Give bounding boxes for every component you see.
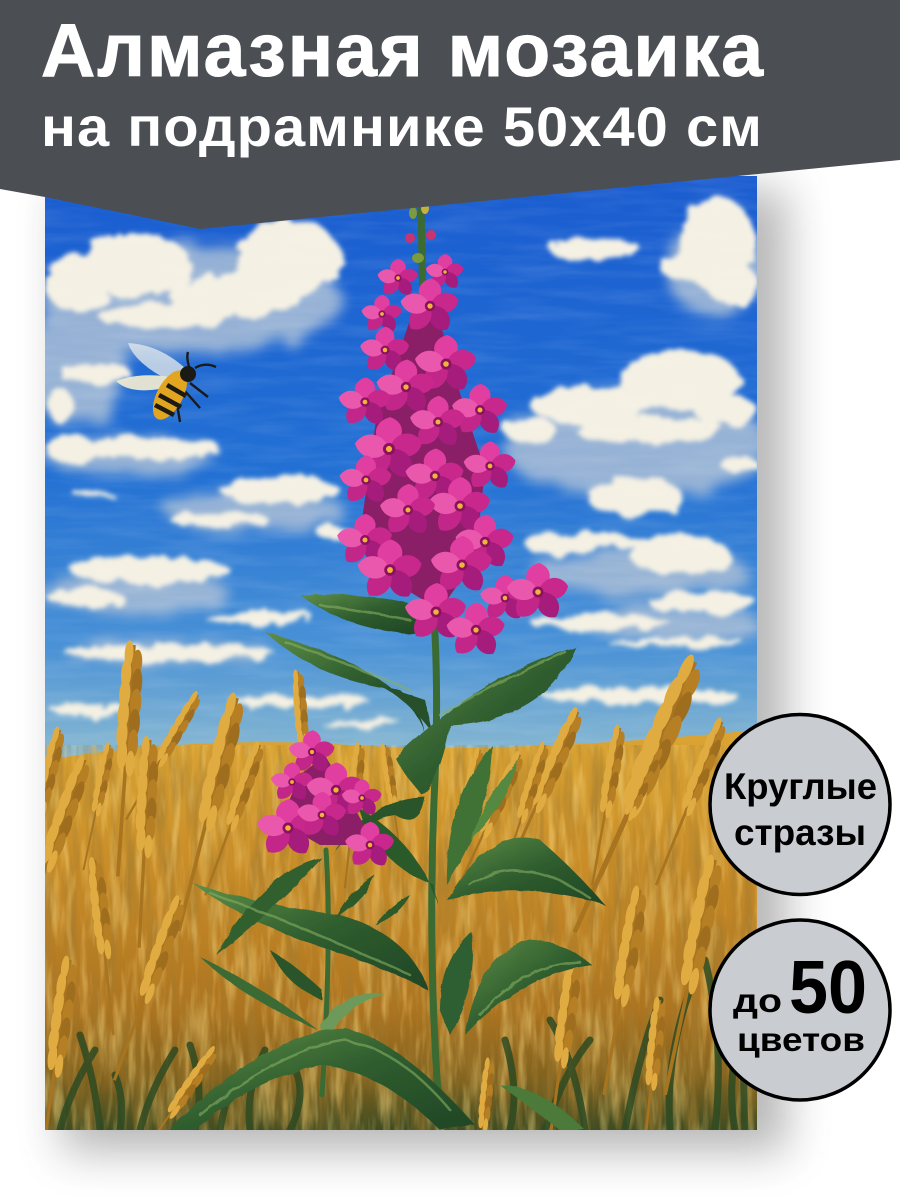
leaf highlights: [200, 605, 590, 1115]
wheat ears: [45, 640, 726, 1130]
fireweed flower spike: [337, 202, 568, 654]
title line 2: на подрамнике 50х40 см: [41, 95, 763, 158]
badge: up to 50 colours: цветов: [737, 1021, 865, 1058]
clouds: [25, 197, 770, 726]
header banner: [0, 0, 900, 229]
badge: up to 50 colours: [710, 920, 890, 1100]
badge: up to 50 colours: 50: [789, 945, 867, 1029]
painting: [45, 176, 757, 1130]
bee: [116, 343, 216, 425]
buds: [405, 202, 436, 263]
badge: round rhinestones: стразы: [734, 812, 866, 853]
title line 1: Алмазная мозаика: [41, 8, 765, 92]
wheat field: [45, 730, 757, 1130]
plant stems: [322, 205, 438, 1095]
small flower cluster: [257, 730, 394, 865]
canvas shadow: [62, 190, 787, 1152]
sky: [45, 176, 757, 766]
leaves: [168, 594, 605, 1130]
badge: up to 50 colours: до: [733, 982, 782, 1019]
badge: round rhinestones: [710, 714, 890, 894]
badge: round rhinestones: Круглые: [724, 766, 877, 807]
